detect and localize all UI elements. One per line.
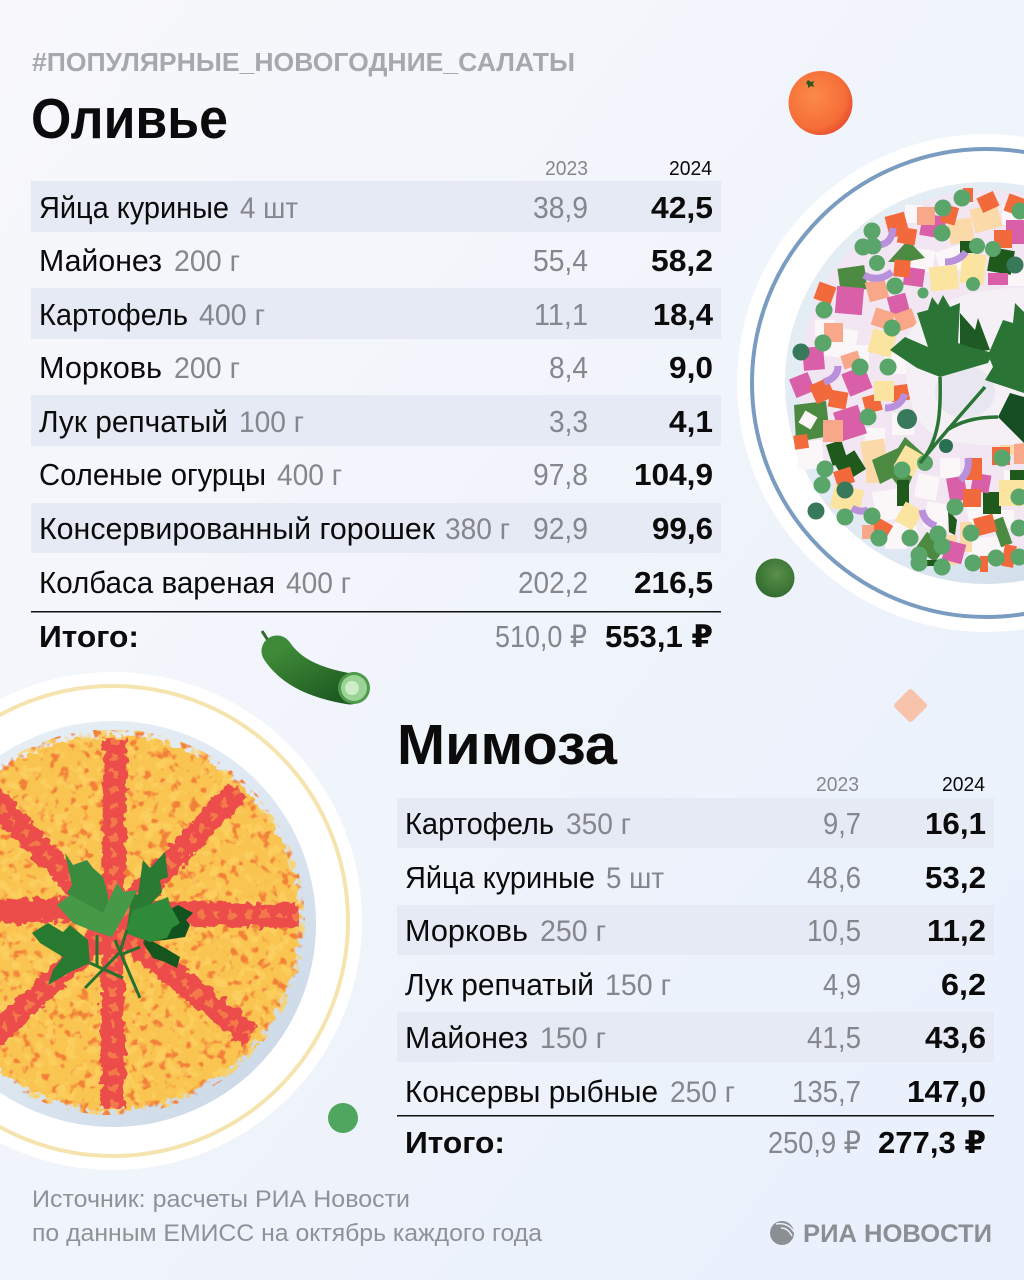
row: mayonnaise: 43,6	[925, 1020, 986, 1055]
peas	[792, 190, 1024, 576]
row: sausage: 216,5	[634, 565, 713, 600]
row: carrot: 11,2	[927, 913, 986, 948]
row: pickles: 104,9	[634, 457, 713, 492]
row: pickles: 97,8	[533, 457, 588, 492]
row: pickles: Соленые огурцы	[39, 457, 266, 492]
row: potato	[405, 806, 986, 841]
icon: green pea	[328, 1103, 358, 1133]
row: onion	[405, 967, 986, 1002]
row: potato: 11,1	[534, 297, 588, 332]
row bands	[397, 798, 994, 1062]
pale peach pieces	[860, 203, 1022, 565]
row: peas: Консервированный горошек	[39, 511, 435, 546]
row: potato: Картофель	[405, 806, 554, 841]
row: eggs: 4 шт	[240, 192, 298, 225]
row: carrot: 9,0	[669, 350, 713, 385]
lower left leaf	[32, 923, 90, 985]
plate bowl	[0, 721, 316, 1127]
row: peas: 92,9	[533, 511, 588, 546]
hashtag: #ПОПУЛЯРНЫЕ_НОВОГОДНИЕ_САЛАТЫ	[32, 47, 575, 77]
source note: по данным ЕМИСС на октябрь каждого года	[32, 1220, 543, 1247]
total row	[31, 611, 721, 654]
carrot spokes	[0, 738, 300, 1108]
row: carrot: Морковь	[405, 913, 528, 948]
year headers: 2024	[669, 158, 712, 180]
row: potato: 9,7	[823, 806, 861, 841]
row: mayonnaise: 58,2	[651, 243, 713, 278]
plate gold ring	[0, 686, 348, 1156]
row: carrot	[39, 350, 713, 385]
plate rim	[737, 134, 1024, 632]
onion arcs	[824, 228, 968, 526]
row: sausage: 202,2	[518, 565, 588, 600]
source note: Источник: расчеты РИА Новости	[32, 1186, 410, 1213]
row: eggs: Яйца куриные	[39, 190, 229, 225]
dark lower leaf	[998, 393, 1024, 443]
row: eggs	[39, 190, 713, 225]
row: mayonnaise: 41,5	[807, 1020, 861, 1055]
row: potato: 350 г	[566, 808, 631, 841]
right leaf	[125, 897, 180, 942]
parsley	[890, 295, 1024, 463]
row: mayonnaise: 55,4	[533, 243, 588, 278]
row: eggs: Яйца куриные	[405, 860, 595, 895]
upper right leaf	[127, 852, 168, 927]
row: canned fish: Консервы рыбные	[405, 1074, 658, 1109]
main left leaf	[890, 295, 993, 377]
row: eggs: 48,6	[807, 860, 861, 895]
top left leaf	[65, 853, 110, 930]
total row: Итого:	[405, 1125, 505, 1160]
row: peas: 99,6	[652, 511, 713, 546]
dark back leaf	[960, 313, 990, 352]
row: canned fish	[405, 1074, 986, 1109]
parsley	[32, 852, 193, 998]
title: Mimosa: Мимоза	[397, 713, 618, 777]
row: carrot: 200 г	[174, 352, 240, 385]
row: mayonnaise: 150 г	[540, 1022, 606, 1055]
row: carrot: Морковь	[39, 350, 162, 385]
row: sausage: 400 г	[286, 567, 351, 600]
row: peas	[39, 511, 713, 546]
row: potato: 16,1	[925, 806, 986, 841]
total row: 510,0 ₽	[495, 619, 587, 654]
row: onion: 4,9	[823, 967, 861, 1002]
row: eggs: 53,2	[925, 860, 986, 895]
row: carrot: 10,5	[807, 913, 861, 948]
total row: 250,9 ₽	[768, 1125, 861, 1160]
row: carrot: 8,4	[549, 350, 588, 385]
row: mayonnaise	[39, 243, 713, 278]
white pieces	[796, 205, 1024, 557]
row: potato: Картофель	[39, 297, 188, 332]
row: peas: 380 г	[445, 513, 510, 546]
plate blue ring	[752, 149, 1024, 617]
year headers	[545, 158, 712, 180]
row: pickles: 400 г	[277, 459, 342, 492]
source note	[32, 1186, 543, 1247]
row: onion: 3,3	[549, 404, 588, 439]
row: onion: 6,2	[941, 967, 986, 1002]
row: mayonnaise: Майонез	[39, 243, 162, 278]
salad pieces	[789, 188, 1024, 576]
center light leaf	[57, 883, 137, 937]
row: sausage	[39, 565, 713, 600]
salad texture	[0, 730, 310, 1120]
row: onion: 4,1	[669, 404, 713, 439]
dark pea under stem	[939, 439, 953, 453]
salad base	[800, 190, 1024, 566]
dark right leaf	[143, 905, 193, 942]
salad central mound	[905, 287, 1024, 445]
row: potato: 400 г	[199, 299, 265, 332]
title: Olivier: Оливье	[31, 87, 228, 151]
row: carrot: 250 г	[540, 915, 606, 948]
right leaf	[985, 303, 1024, 393]
total row: Итого:	[39, 619, 139, 654]
table: Olivier	[31, 158, 721, 654]
row: eggs	[405, 860, 986, 895]
row: mayonnaise: Майонез	[405, 1020, 528, 1055]
logo: RIA Novosti: РИА НОВОСТИ	[803, 1220, 992, 1248]
row: carrot	[405, 913, 986, 948]
row: sausage: Колбаса вареная	[39, 565, 275, 600]
row: potato: 18,4	[653, 297, 714, 332]
row: pickles	[39, 457, 713, 492]
year headers: 2023	[545, 158, 588, 180]
total row	[397, 1115, 994, 1160]
icon: tangerine	[788, 71, 852, 135]
row: eggs: 5 шт	[606, 862, 664, 895]
icon: peach diamond	[893, 688, 928, 723]
year headers: 2023	[816, 774, 859, 796]
dark lower right leaf	[143, 940, 180, 968]
stems	[920, 377, 998, 463]
total row: 277,3 ₽	[878, 1125, 986, 1160]
salad yolk base	[0, 735, 299, 1109]
row: mayonnaise: 200 г	[174, 245, 240, 278]
icon: dark green pea	[756, 558, 794, 598]
plate: Olivier salad	[737, 134, 1024, 632]
row: potato	[39, 297, 714, 332]
table: Mimosa	[397, 774, 994, 1160]
row: canned fish: 135,7	[792, 1074, 861, 1109]
row bands	[31, 181, 721, 553]
row: onion: 100 г	[239, 406, 304, 439]
row: canned fish: 147,0	[907, 1074, 986, 1109]
row: eggs: 42,5	[651, 190, 713, 225]
row: onion: Лук репчатый	[405, 967, 594, 1002]
row: mayonnaise	[405, 1020, 986, 1055]
total row: 553,1 ₽	[605, 619, 713, 654]
year headers	[816, 774, 985, 796]
stems	[85, 930, 140, 998]
row: canned fish: 250 г	[670, 1076, 735, 1109]
plate rim	[0, 672, 362, 1170]
icon: cucumber	[262, 631, 370, 704]
row: onion: Лук репчатый	[39, 404, 228, 439]
plate bowl	[785, 182, 1024, 584]
row: onion	[39, 404, 713, 439]
plate: Mimosa salad	[0, 672, 362, 1170]
logo globe	[770, 1221, 794, 1245]
row: eggs: 38,9	[533, 190, 588, 225]
row: onion: 150 г	[605, 969, 671, 1002]
year headers: 2024	[942, 774, 985, 796]
